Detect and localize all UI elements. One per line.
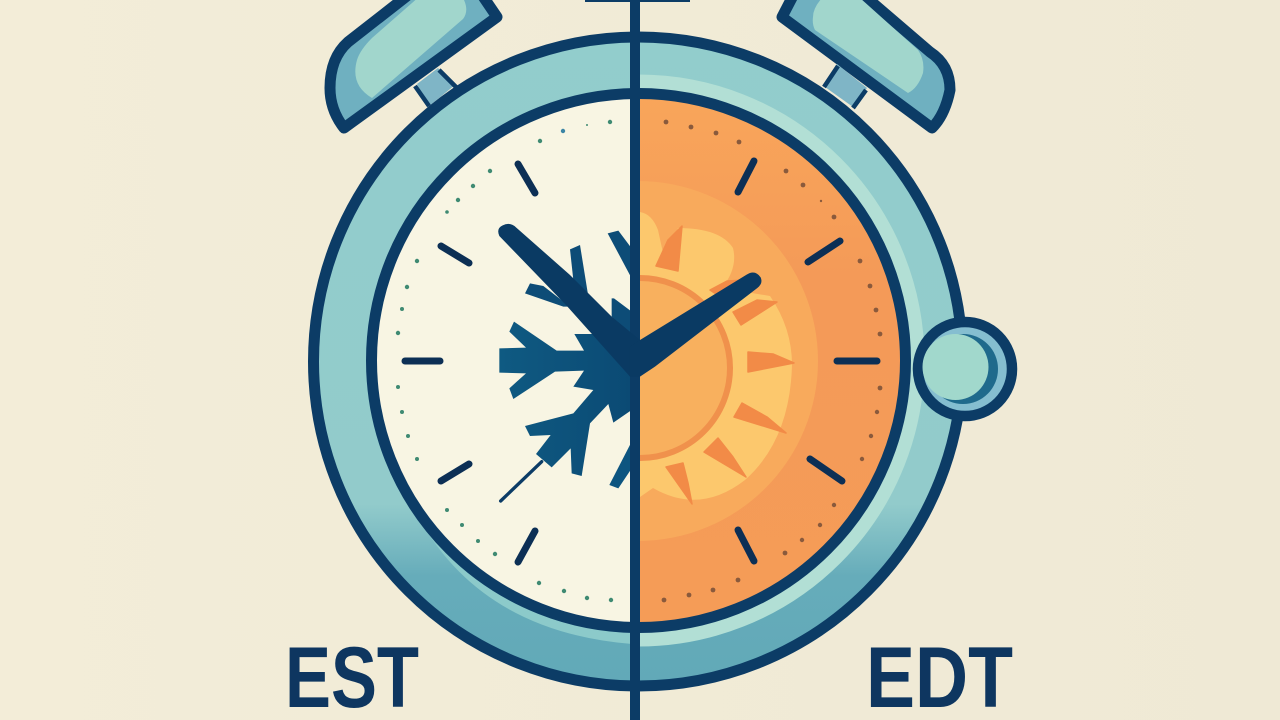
clock outer ring — [314, 37, 962, 686]
hour hand — [630, 273, 761, 377]
minute dots: summer half — [662, 120, 882, 602]
icon: snowflake — [499, 231, 632, 501]
icon: side knob — [918, 322, 1012, 416]
minute dots: winter half — [396, 120, 613, 602]
icon: left bell — [330, 0, 497, 128]
icon: right bell — [782, 0, 950, 128]
sun — [640, 212, 795, 505]
center divider line — [630, 0, 640, 720]
sun glow — [640, 181, 818, 541]
clock hands — [498, 224, 761, 377]
clock inner ring — [372, 94, 906, 628]
clock face: winter half — [370, 90, 635, 630]
hour ticks — [405, 161, 877, 562]
sun rays — [656, 226, 794, 504]
top cap of the divider — [585, 0, 690, 2]
minute hand — [498, 224, 640, 377]
clock face: summer half — [640, 99, 900, 622]
